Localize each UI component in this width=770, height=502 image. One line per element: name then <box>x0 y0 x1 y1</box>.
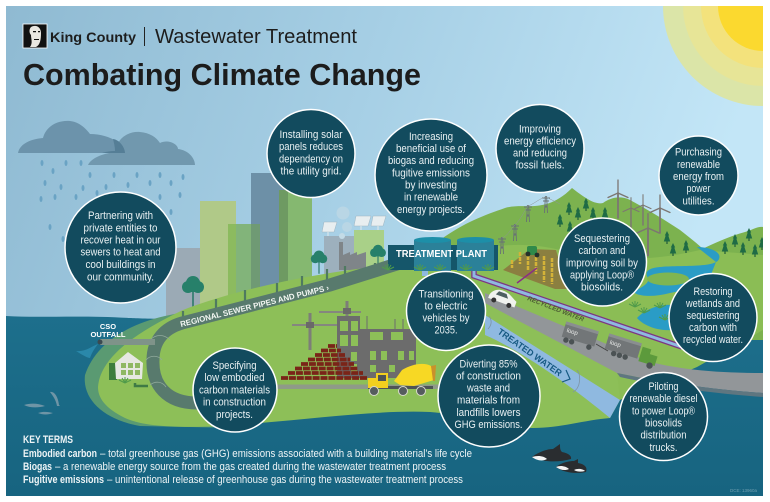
callout: wetlands: sequestering <box>686 310 740 322</box>
sun <box>663 6 763 106</box>
callout: solar panels: the utility grid. <box>280 166 342 178</box>
sewer pipe <box>146 263 400 403</box>
callout: solar panels: panels reduces <box>279 141 343 153</box>
electric car <box>488 290 516 308</box>
callout: soil carbon: improving soil by <box>566 258 638 270</box>
CSO outfall: OUTFALL <box>90 330 126 339</box>
callout: solar panels <box>267 110 355 198</box>
river and wetlands <box>629 247 719 330</box>
callout: low carbon materials: projects. <box>216 409 253 421</box>
callout: renewable energy: power <box>686 183 711 195</box>
callout: low carbon materials: low embodied <box>204 372 264 384</box>
callout: soil carbon: carbon and <box>578 245 626 257</box>
treated water chevron <box>562 370 570 382</box>
callout: heat recovery: sewers to heat and <box>80 246 160 258</box>
department name: Wastewater Treatment <box>155 25 357 48</box>
callout: low carbon materials: carbon materials <box>199 384 270 396</box>
pine trees <box>557 198 765 257</box>
callout: heat recovery <box>65 192 176 303</box>
callout: wetlands: recycled water. <box>683 334 743 346</box>
callout: biogas: by investing <box>405 180 457 192</box>
rain clouds <box>18 121 195 165</box>
callout: renewable energy: Purchasing <box>675 146 722 158</box>
callout: renewable energy: utilities. <box>682 196 714 208</box>
callout: soil carbon: Sequestering <box>574 233 630 245</box>
callout: wetlands: carbon with <box>689 322 737 334</box>
callout: heat recovery: Partnering with <box>88 210 153 222</box>
logo <box>23 24 47 48</box>
key terms: Embodied carbon <box>23 448 97 460</box>
callout: renewable diesel: Piloting <box>648 381 678 393</box>
callout: low carbon materials <box>193 348 277 432</box>
treatment plant: TREATMENT PLANT <box>396 249 487 260</box>
key terms <box>23 434 472 486</box>
callout: construction waste: Diverting 85% <box>460 358 518 370</box>
callout: renewable energy: energy from <box>673 171 724 183</box>
solar panels on buildings <box>322 216 386 236</box>
sewer pipe label: REGIONAL SEWER PIPES AND PUMPS › <box>179 283 330 329</box>
callout: construction waste: of construction <box>456 370 521 382</box>
callout: renewable diesel <box>620 372 708 460</box>
callout: heat recovery: cool buildings in <box>86 259 156 271</box>
shoreline band <box>84 314 214 428</box>
callout: energy efficiency: energy efficiency <box>504 136 576 148</box>
callout: energy efficiency: and reducing <box>513 148 567 160</box>
road <box>485 293 763 397</box>
cement mixer truck <box>368 364 436 396</box>
city trees <box>182 245 386 307</box>
callout: heat recovery: private entities to <box>84 222 158 234</box>
callout: energy efficiency: Improving <box>519 124 561 136</box>
hills <box>430 188 763 340</box>
wind turbines <box>608 180 670 256</box>
sky <box>6 6 763 326</box>
callout: energy efficiency <box>496 104 584 192</box>
callout: heat recovery: recover heat in our <box>80 234 161 246</box>
callout: electric vehicles: 2035. <box>434 324 458 336</box>
callout: construction waste <box>438 345 540 447</box>
rain <box>40 160 184 242</box>
callout: low carbon materials: in construction <box>203 396 266 408</box>
factory and smoke <box>336 206 366 270</box>
foreground land behind the road <box>440 245 763 400</box>
callout: renewable energy: renewable <box>677 159 720 171</box>
key terms: – total greenhouse gas (GHG) emissions associated with a building material’s life cycle <box>100 448 472 460</box>
callout: electric vehicles: vehicles by <box>422 312 470 324</box>
CSO outfall: CSO <box>100 322 116 331</box>
callout: electric vehicles: to electric <box>424 300 468 312</box>
treatment plant <box>382 237 498 271</box>
header divider <box>144 27 145 46</box>
callout: electric vehicles <box>406 272 486 350</box>
callout: construction waste: waste and <box>466 382 510 394</box>
key terms: Fugitive emissions <box>23 474 104 486</box>
biosolids truck <box>560 321 659 370</box>
callout: construction waste: landfills lowers <box>456 407 521 419</box>
callout: biogas: biogas and reducing <box>388 155 474 167</box>
title: Combating Climate Change <box>23 57 421 92</box>
callout: renewable diesel: to power Loop® <box>632 406 696 418</box>
fish <box>24 392 60 414</box>
house <box>109 352 148 386</box>
callout: wetlands: wetlands and <box>685 298 740 310</box>
CSO outfall <box>76 322 155 358</box>
key terms: – unintentional release of greenhouse gas during the wastewater treatment process <box>107 474 463 486</box>
main land <box>98 262 620 428</box>
water <box>6 316 763 496</box>
callout: biogas <box>375 119 487 231</box>
organisation name: King County <box>50 29 136 45</box>
callout: heat recovery: our community. <box>87 272 154 284</box>
pipe stubs <box>183 263 375 322</box>
key terms: – a renewable energy source from the gas created during the wastewater treatment process <box>55 461 446 473</box>
key terms: Biogas <box>23 461 52 473</box>
construction crane and building <box>292 301 416 378</box>
callout: biogas: fugitive emissions <box>392 168 470 180</box>
document code: DCE: 13960a <box>730 488 757 493</box>
construction road <box>277 384 442 389</box>
callout: renewable energy <box>659 136 738 215</box>
callout: renewable diesel: trucks. <box>650 442 678 454</box>
callout: biogas: energy projects. <box>397 204 465 216</box>
biosolids truck: loop <box>566 328 579 337</box>
callout: wetlands <box>669 274 757 362</box>
key terms: KEY TERMS <box>23 434 73 446</box>
callout: energy efficiency: fossil fuels. <box>516 160 564 172</box>
treated water channel <box>425 268 620 418</box>
callout: soil carbon: applying Loop® <box>570 270 635 282</box>
city buildings <box>166 173 384 323</box>
callout: biogas: Increasing <box>409 131 453 143</box>
callout: soil carbon <box>558 218 646 306</box>
callout: renewable diesel: renewable diesel <box>630 393 698 405</box>
biosolids truck: loop <box>609 340 622 349</box>
callout: construction waste: GHG emissions. <box>454 419 522 431</box>
callout: solar panels: Installing solar <box>280 129 343 141</box>
treated water label: TREATED WATER <box>496 326 564 379</box>
orcas <box>532 444 587 473</box>
callout: soil carbon: biosolids. <box>581 282 623 294</box>
callout: low carbon materials: Specifying <box>212 360 256 372</box>
brick pile <box>281 346 367 378</box>
callout: construction waste: materials from <box>457 394 520 406</box>
callout: electric vehicles: Transitioning <box>418 288 474 300</box>
callout: solar panels: dependency on <box>279 154 343 166</box>
callout: renewable diesel: distribution <box>640 430 686 442</box>
crop field and tractor <box>503 246 567 289</box>
power lines <box>498 196 560 254</box>
callout: wetlands: Restoring <box>694 286 732 298</box>
recycled water label: RECYCLED WATER <box>526 295 585 323</box>
callout: biogas: beneficial use of <box>396 143 467 155</box>
callout: renewable diesel: biosolids <box>645 418 682 430</box>
callout: biogas: in renewable <box>404 192 458 204</box>
recycled water line <box>474 268 682 347</box>
